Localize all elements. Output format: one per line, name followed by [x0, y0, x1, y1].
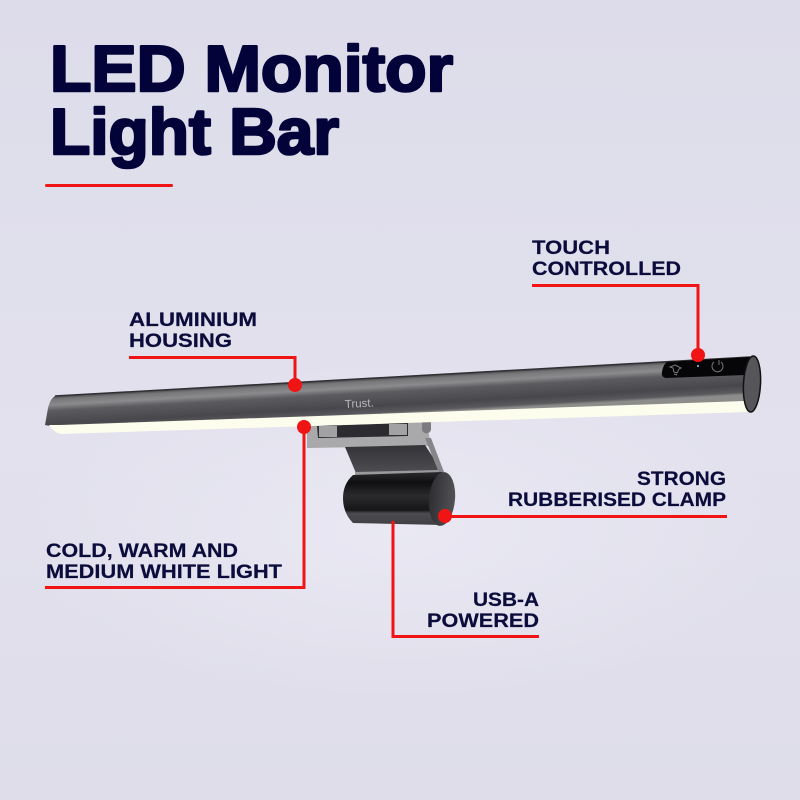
title: LED Monitor: [50, 32, 453, 105]
callout: aluminium housing: [129, 309, 302, 392]
callout: rubberised clamp: RUBBERISED CLAMP: [508, 489, 726, 511]
callout: light colours: MEDIUM WHITE LIGHT: [46, 561, 282, 583]
callout: touch controlled: TOUCH: [532, 237, 610, 259]
callout: aluminium housing: ALUMINIUM: [129, 309, 257, 331]
title underline: [45, 184, 173, 187]
callout: touch controlled: CONTROLLED: [532, 258, 681, 280]
touch panel: [662, 357, 750, 378]
icon: bulb: [670, 365, 681, 375]
callout: touch controlled: [532, 237, 705, 362]
hinge bracket: [307, 418, 431, 448]
callout: rubberised clamp: [438, 468, 727, 523]
title: Light Bar: [50, 95, 339, 168]
indicator dot: [697, 365, 699, 367]
title: [50, 32, 453, 168]
end cap: [742, 356, 762, 412]
light bar: [45, 356, 762, 434]
clamp end cap: [427, 471, 457, 527]
callout: light colours: [45, 420, 311, 588]
LED strip: [49, 401, 748, 434]
brand logo: Trust.: [345, 397, 374, 411]
callout: usb-a powered: POWERED: [427, 610, 539, 632]
clamp arm: [345, 445, 444, 482]
bar body: [45, 357, 750, 428]
clamp assembly: [307, 418, 457, 527]
rubber clamp cylinder: [343, 472, 442, 525]
callout: aluminium housing: HOUSING: [129, 330, 232, 352]
callout: usb-a powered: USB-A: [473, 589, 539, 611]
callout: usb-a powered: [393, 521, 539, 636]
icon: power: [712, 360, 723, 372]
callout: light colours: COLD, WARM AND: [46, 540, 238, 562]
callout: rubberised clamp: STRONG: [637, 468, 726, 490]
top edge: [55, 357, 750, 396]
